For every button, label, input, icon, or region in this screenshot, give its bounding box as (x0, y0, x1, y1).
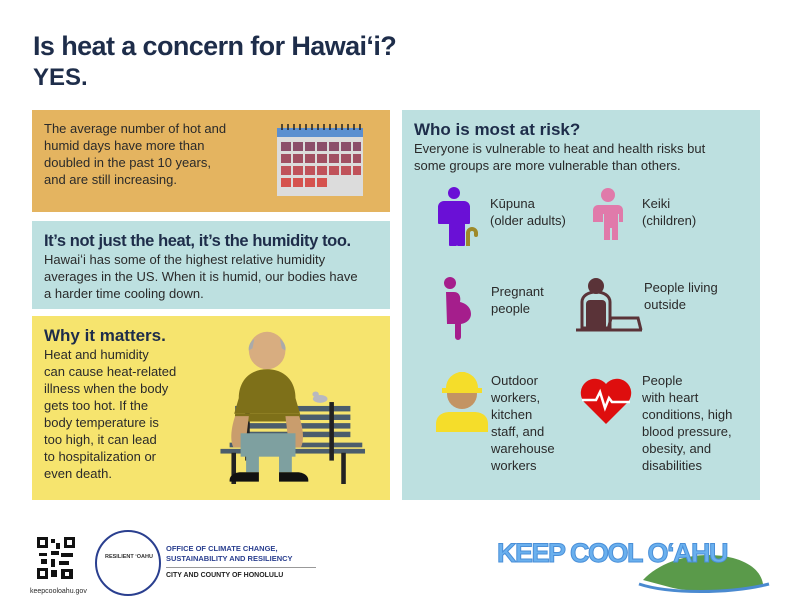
item: people living outside (576, 278, 718, 332)
footer: keep cool oahu logo: KEEP COOL OʻAHU (497, 538, 727, 568)
title: Is heat a concern for Hawaiʻi? (33, 31, 396, 61)
footer: office text: SUSTAINABILITY AND RESILIENCY (166, 554, 293, 563)
footer: qr code: keepcooloahu.gov (30, 588, 87, 595)
item: heart conditions: People (642, 373, 682, 388)
heading: humidity: It’s not just the heat, it’s the humidity too. (44, 232, 351, 250)
footer: resilient oahu logo (95, 530, 161, 596)
panel: humidity (32, 221, 390, 309)
item: outdoor workers: workers, (491, 390, 540, 405)
item: outdoor workers: workers (491, 458, 537, 473)
item: kupuna: Kūpuna (490, 196, 535, 211)
title (33, 31, 396, 91)
item: heart conditions: blood pressure, (642, 424, 732, 439)
text: humidity: averages in the US. When it is humid, our bodies have (44, 269, 358, 284)
heading: who is most at risk: Who is most at risk? (414, 120, 580, 139)
text: humidity (44, 252, 358, 301)
item: heart conditions: with heart (642, 390, 698, 405)
item: heart conditions: conditions, high (642, 407, 732, 422)
text: why it matters: Heat and humidity (44, 347, 149, 362)
text: humidity: Hawaiʻi has some of the highest relative humidity (44, 252, 325, 267)
text: why it matters: to hospitalization or (44, 449, 156, 464)
panel: who is most at risk (402, 110, 760, 500)
footer: resilient oahu logo: RESILIENT ʻOAHU (105, 554, 153, 560)
text: why it matters: can cause heat-related (44, 364, 176, 379)
text: intro (414, 141, 706, 173)
text: humidity: a harder time cooling down. (44, 286, 204, 301)
text: hot days: and are still increasing. (44, 172, 177, 187)
text: hot days: doubled in the past 10 years, (44, 155, 211, 170)
panel: hot days (32, 110, 390, 212)
text: why it matters: body temperature is (44, 415, 159, 430)
panel: why it matters (32, 316, 390, 500)
footer: office text (166, 544, 316, 579)
item: pregnant: Pregnant (491, 284, 544, 299)
item: keiki: Keiki (642, 196, 670, 211)
footer: office text: OFFICE OF CLIMATE CHANGE, (166, 544, 278, 553)
text: hot days: humid days have more than (44, 138, 204, 153)
item: outdoor workers: warehouse (491, 441, 555, 456)
item: outdoor workers: staff, and (491, 424, 544, 439)
item: keiki: (children) (642, 213, 696, 228)
item: heart conditions (580, 373, 732, 473)
text: hot days: The average number of hot and (44, 121, 226, 136)
item: kupuna: (older adults) (490, 213, 566, 228)
text: why it matters: illness when the body (44, 381, 168, 396)
text: hot days (44, 121, 226, 187)
footer: office text: CITY AND COUNTY OF HONOLULU (166, 572, 283, 579)
item: keiki (593, 188, 696, 240)
item: outdoor workers: kitchen (491, 407, 532, 422)
item: heart conditions: obesity, and (642, 441, 711, 456)
text: intro: Everyone is vulnerable to heat and health risks but (414, 141, 705, 156)
icon: calendar (277, 124, 363, 196)
heading: why it matters: Why it matters. (44, 326, 166, 345)
item: kupuna (438, 187, 566, 246)
text: why it matters (44, 347, 176, 481)
item: people living outside: People living (644, 280, 718, 295)
text: why it matters: too high, it can lead (44, 432, 157, 447)
item: outdoor workers (436, 372, 555, 473)
text: why it matters: even death. (44, 466, 112, 481)
text: intro: some groups are more vulnerable than others. (414, 158, 681, 173)
footer: qr code (30, 537, 87, 595)
item: people living outside: outside (644, 297, 686, 312)
footer: keep cool oahu logo (497, 538, 770, 593)
illustration: man on bench (220, 332, 365, 484)
item: pregnant: people (491, 301, 530, 316)
title: YES. (33, 64, 88, 91)
item: heart conditions: disabilities (642, 458, 702, 473)
item: pregnant (444, 277, 544, 340)
text: why it matters: gets too hot. If the (44, 398, 148, 413)
item: outdoor workers: Outdoor (491, 373, 538, 388)
